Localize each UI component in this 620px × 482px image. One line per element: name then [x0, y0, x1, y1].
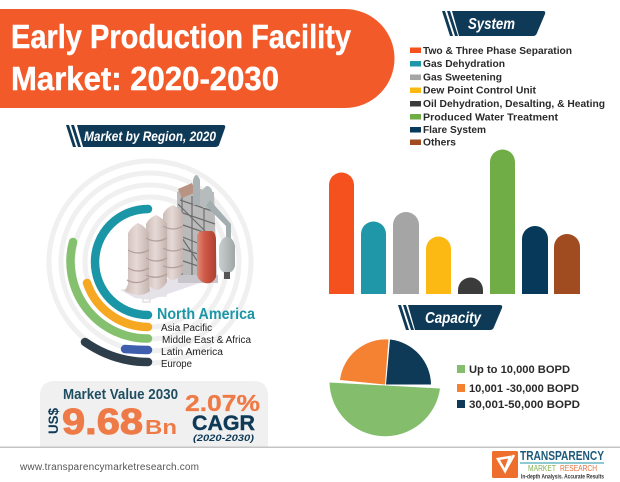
title banner: Market: 2020-2030	[11, 60, 279, 97]
heading: system	[442, 11, 545, 36]
arc: latin america	[125, 349, 148, 350]
system legend	[410, 45, 605, 148]
heading: system: System	[468, 16, 515, 33]
pie chart: capacity	[330, 339, 440, 436]
capacity legend	[457, 364, 580, 411]
region radial chart	[49, 161, 251, 363]
system legend: Flare System	[423, 124, 486, 136]
system legend: Produced Water Treatment	[423, 112, 558, 124]
logo: transparency market research: RESEARCH	[560, 464, 597, 473]
arc: north america	[95, 209, 148, 315]
market value panel	[40, 381, 268, 447]
heading: market by region	[66, 125, 225, 147]
region labels: Latin America	[161, 347, 223, 358]
region labels: North America	[157, 306, 255, 323]
market value panel: 9.68	[62, 401, 143, 442]
region labels: Middle East & Africa	[162, 335, 251, 346]
system legend: Others	[423, 136, 456, 148]
capacity legend: 10,001 -30,000 BOPD	[469, 383, 579, 395]
bar chart: system	[329, 150, 580, 294]
system legend: Oil Dehydration, Desalting, & Heating	[423, 98, 605, 110]
system legend: Two & Three Phase Separation	[423, 45, 572, 57]
market value panel: CAGR	[192, 412, 255, 435]
arc: middle east and africa	[70, 242, 148, 339]
market value panel: Market Value 2030	[63, 387, 178, 403]
capacity legend: Up to 10,000 BOPD	[469, 364, 570, 376]
market value panel: (2020-2030)	[193, 433, 254, 444]
footer divider	[0, 446, 620, 448]
capacity legend: 30,001-50,000 BOPD	[469, 399, 580, 411]
heading: market by region: Market by Region, 2020	[84, 128, 216, 144]
region labels: Asia Pacific	[161, 323, 212, 334]
system legend: Gas Sweetening	[423, 72, 502, 84]
logo: transparency market research	[492, 448, 604, 480]
title banner	[0, 9, 394, 108]
logo: transparency market research: MARKET	[528, 464, 556, 473]
market value panel: US$	[45, 408, 61, 434]
heading: capacity: Capacity	[425, 310, 482, 327]
website url: www.transparencymarketresearch.com	[19, 462, 199, 473]
title banner: Early Production Facility	[11, 18, 352, 55]
region labels: Europe	[161, 359, 192, 370]
market value panel: Bn	[145, 417, 177, 439]
system legend: Gas Dehydration	[423, 58, 505, 70]
arc: europe	[85, 342, 148, 362]
arc: asia pacific	[87, 283, 148, 327]
heading: capacity	[398, 305, 502, 330]
market value panel: 2.07%	[185, 390, 260, 416]
system legend: Dew Point Control Unit	[423, 84, 536, 96]
region labels	[157, 306, 255, 370]
icon: production facility illustration	[120, 175, 235, 302]
